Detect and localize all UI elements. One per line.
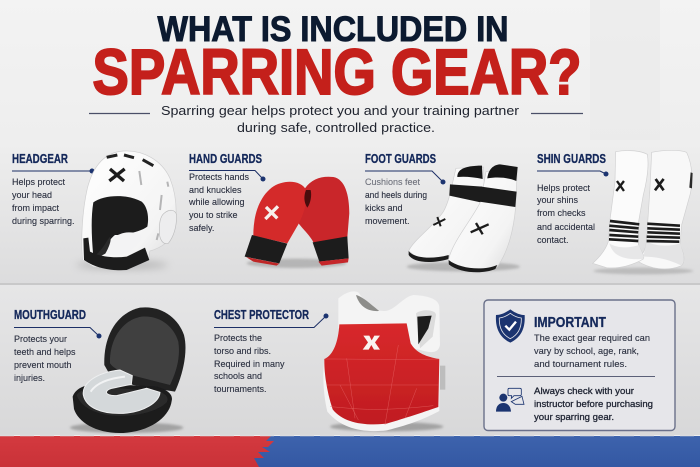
- text: mouthguard: prevent mouth: [14, 360, 72, 370]
- panel: shin guards: [537, 150, 693, 274]
- text: mouthguard: Protects your: [14, 334, 67, 344]
- text: hand guards: and knuckles: [189, 185, 242, 195]
- text: important note: [534, 333, 650, 370]
- heading: headgear: HEADGEAR: [12, 152, 68, 166]
- text: foot guards: [365, 177, 427, 226]
- text: hand guards: Protects hands: [189, 172, 250, 182]
- text: shin guards: [537, 183, 595, 245]
- panel: chest protector: [214, 291, 445, 431]
- text: foot guards: kicks and: [365, 203, 403, 213]
- icon: foot guards: [407, 164, 520, 272]
- heading: mouthguard: MOUTHGUARD: [14, 308, 86, 322]
- text: important note: The exact gear required can: [534, 333, 650, 344]
- callout line: chest protector: [214, 314, 328, 328]
- icon: chest protector: [323, 291, 445, 431]
- callout line: mouthguard: [14, 328, 102, 338]
- text: foot guards: and heels during: [365, 190, 427, 200]
- text: instructor advice: instructor before purchasing: [534, 399, 653, 410]
- text: chest protector: [214, 333, 285, 394]
- text: headgear: during sparring.: [12, 216, 75, 226]
- panel: foot guards: [365, 152, 520, 272]
- text: headgear: from impact: [12, 203, 60, 213]
- text: foot guards: Cushions feet: [365, 177, 421, 187]
- panel: hand guards: [188, 152, 349, 268]
- icon: mouthguard case: [70, 307, 185, 433]
- panel: mouthguard: [14, 307, 185, 433]
- text: shin guards: Helps protect: [537, 183, 591, 193]
- callout line: foot guards: [365, 171, 446, 184]
- text: instructor advice: [534, 386, 653, 423]
- callout line: headgear: [12, 168, 94, 174]
- text: mouthguard: injuries.: [14, 373, 45, 383]
- callout line: hand guards: [189, 170, 266, 182]
- callout line: shin guards: [537, 171, 608, 176]
- icon: boxing gloves: [245, 177, 349, 268]
- text: hand guards: safely.: [189, 223, 214, 233]
- heading: shin guards: SHIN GUARDS: [537, 152, 606, 166]
- text: instructor advice: your sparring gear.: [534, 412, 614, 423]
- text: headgear: Helps protect: [12, 177, 66, 187]
- text: important note: vary by school, age, rank,: [534, 346, 639, 357]
- heading: hand guards: HAND GUARDS: [189, 152, 262, 166]
- text: hand guards: you to strike: [189, 210, 238, 220]
- heading: important: IMPORTANT: [534, 314, 606, 331]
- icon: helmet: [76, 151, 177, 270]
- text: headgear: [12, 177, 75, 226]
- text: chest protector: torso and ribs.: [214, 346, 271, 356]
- icon: shin guards: [593, 150, 693, 274]
- text: shin guards: from checks: [537, 208, 586, 218]
- title: [92, 10, 582, 108]
- text: shin guards: and accidental: [537, 222, 595, 232]
- box: [484, 300, 675, 430]
- puzzle mat floor: [0, 436, 700, 467]
- text: shin guards: contact.: [537, 235, 569, 245]
- panel: important note: [484, 300, 675, 430]
- title line 2: SPARRING GEAR?: [92, 36, 582, 108]
- text: shin guards: your shins: [537, 195, 579, 205]
- text: foot guards: movement.: [365, 216, 410, 226]
- text: chest protector: schools and: [214, 371, 262, 381]
- text: chest protector: tournaments.: [214, 384, 267, 394]
- subtitle: [89, 103, 583, 135]
- text: headgear: your head: [12, 190, 52, 200]
- subtitle: Sparring gear helps protect you and your training partner: [161, 103, 520, 118]
- heading: chest protector: CHEST PROTECTOR: [214, 308, 309, 322]
- text: hand guards: [188, 172, 250, 233]
- text: mouthguard: teeth and helps: [14, 347, 76, 357]
- icon: person with speech bubbles: [496, 388, 524, 412]
- text: mouthguard: [14, 334, 76, 383]
- text: chest protector: Protects the: [214, 333, 262, 343]
- text: instructor advice: Always check with your: [534, 386, 635, 397]
- text: chest protector: Required in many: [214, 359, 285, 369]
- text: hand guards: while allowing: [188, 197, 245, 207]
- subtitle: during safe, controlled practice.: [237, 120, 435, 135]
- heading: foot guards: FOOT GUARDS: [365, 152, 436, 166]
- text: important note: and tournament rules.: [534, 359, 627, 370]
- panel: headgear: [12, 151, 177, 270]
- icon: shield with check: [496, 309, 525, 343]
- title line 1: WHAT IS INCLUDED IN: [158, 10, 508, 49]
